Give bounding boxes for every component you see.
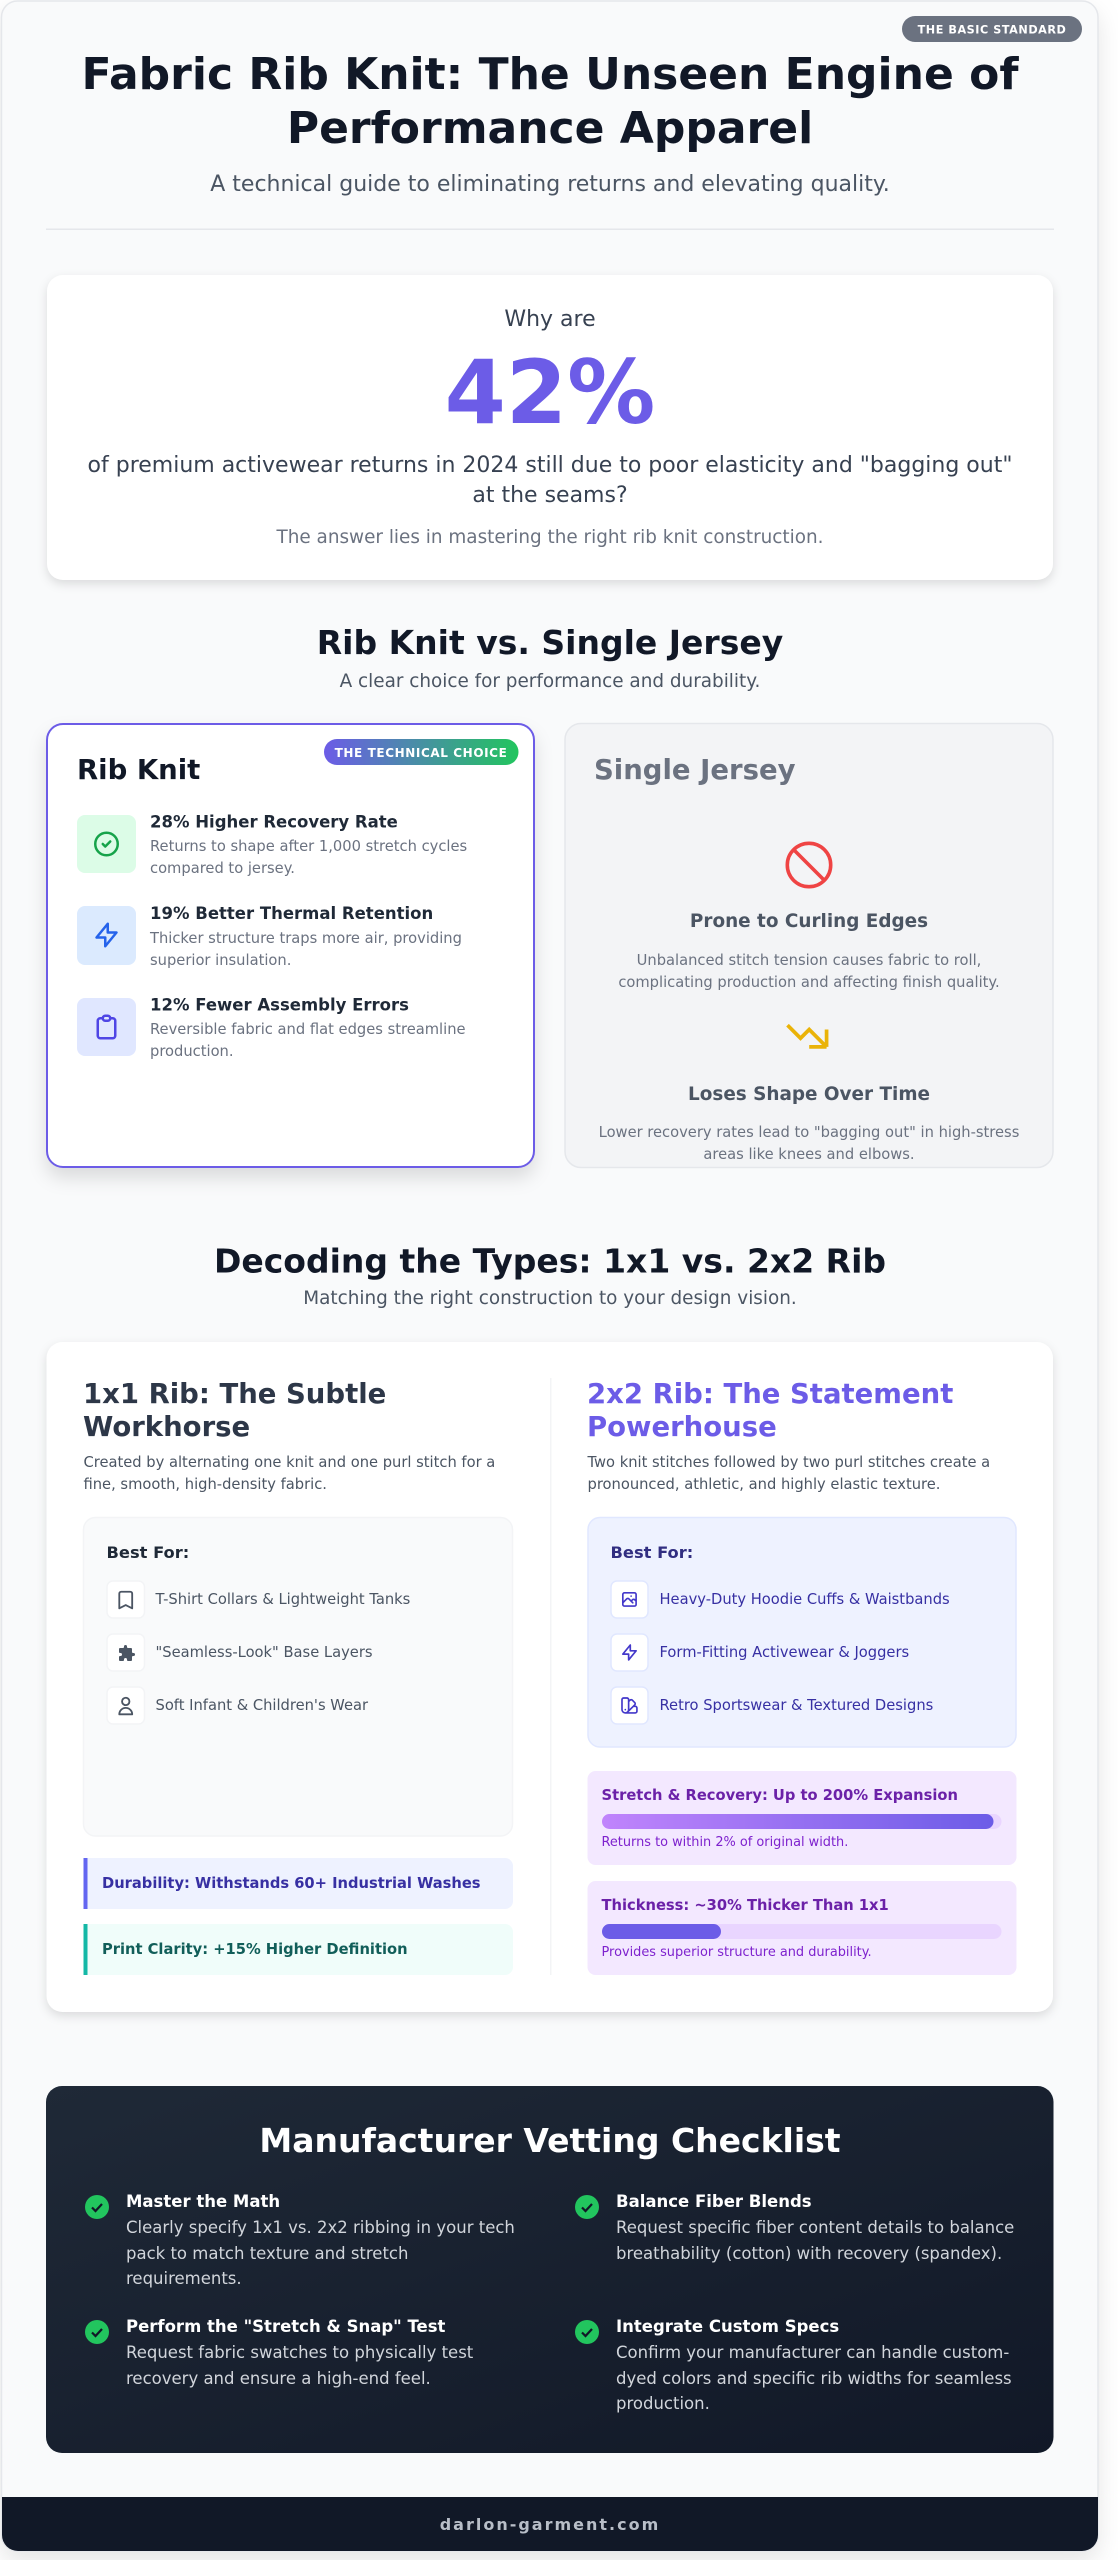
icon: clipboard xyxy=(98,1016,115,1038)
callout: durability: Durability: Withstands 60+ Industrial Washes xyxy=(102,1875,481,1892)
checklist item: master the math: pack to match texture and stretch xyxy=(126,2244,408,2263)
panel: rib knit xyxy=(47,724,534,1167)
feature: recovery rate xyxy=(77,812,467,877)
checklist item: stretch and snap: Request fabric swatches to physically test xyxy=(126,2343,474,2362)
hero question xyxy=(88,453,1012,508)
badge: the basic standard: THE BASIC STANDARD xyxy=(918,24,1066,36)
single jersey heading: Single Jersey xyxy=(594,754,796,786)
best for box: 1x1: Best For: xyxy=(106,1543,189,1562)
feature: assembly errors: Reversible fabric and flat edges streamline xyxy=(150,1021,466,1038)
checklist item: custom specs: dyed colors and specific rib widths for seamless xyxy=(616,2369,1012,2388)
panel: hero statistic xyxy=(47,275,1053,580)
checklist item: balance fiber blends: breathability (cotton) with recovery (spandex). xyxy=(616,2244,1002,2263)
stat: thickness xyxy=(588,1881,1016,1975)
checklist item: custom specs: Integrate Custom Specs xyxy=(616,2317,839,2336)
use: activewear xyxy=(611,1634,909,1671)
feature: recovery rate: 28% Higher Recovery Rate xyxy=(150,812,398,832)
footer: darlon-garment.com xyxy=(440,2515,660,2534)
badge: the basic standard xyxy=(902,16,1082,42)
checklist item: master the math xyxy=(85,2192,515,2288)
use: t-shirt collars xyxy=(107,1581,410,1618)
use: infant wear: Soft Infant & Children's Wear xyxy=(156,1697,369,1714)
use: hoodie cuffs: Heavy-Duty Hoodie Cuffs & Waistbands xyxy=(660,1591,950,1608)
2x2 heading xyxy=(587,1378,953,1443)
hero answer: The answer lies in mastering the right rib knit construction. xyxy=(276,527,824,548)
best for box: 1x1 xyxy=(84,1518,512,1836)
use: seamless base layers: "Seamless-Look" Base Layers xyxy=(156,1644,373,1661)
title: Fabric Rib Knit: The Unseen Engine of xyxy=(82,49,1019,100)
drawback: curling edges: Unbalanced stitch tension causes fabric to roll, xyxy=(637,952,981,969)
use: infant wear xyxy=(107,1687,369,1724)
feature: recovery rate: Returns to shape after 1,000 stretch cycles xyxy=(150,838,467,855)
feature: thermal retention: 19% Better Thermal Retention xyxy=(150,904,433,923)
stat: stretch and recovery: Stretch & Recovery: Up to 200% Expansion xyxy=(602,1787,958,1804)
badge: the technical choice: THE TECHNICAL CHOICE xyxy=(335,746,507,760)
panel: manufacturer vetting checklist xyxy=(46,2086,1054,2453)
stat: thickness: Thickness: ~30% Thicker Than 1x1 xyxy=(602,1897,889,1914)
feature: thermal retention: superior insulation. xyxy=(150,952,291,969)
drawback: loses shape: Loses Shape Over Time xyxy=(688,1084,930,1105)
1x1 heading: Workhorse xyxy=(83,1411,250,1443)
use: retro sportswear: Retro Sportswear & Textured Designs xyxy=(660,1697,933,1714)
feature: recovery rate: compared to jersey. xyxy=(150,860,295,877)
badge: the technical choice xyxy=(324,739,518,765)
checklist item: master the math: Clearly specify 1x1 vs. 2x2 ribbing in your tech xyxy=(126,2218,515,2237)
use: retro sportswear xyxy=(611,1687,933,1724)
heading: decoding the types xyxy=(214,1242,886,1309)
checklist item: balance fiber blends xyxy=(575,2192,1014,2263)
feature: assembly errors xyxy=(77,996,466,1060)
1x1 heading: 1x1 Rib: The Subtle xyxy=(83,1378,386,1410)
feature: assembly errors: production. xyxy=(150,1043,234,1060)
icon: ban xyxy=(787,843,831,887)
icon: lightning xyxy=(96,924,116,946)
feature: thermal retention: Thicker structure traps more air, providing xyxy=(149,930,462,947)
callout: print clarity xyxy=(84,1924,513,1975)
column: 1x1 rib xyxy=(83,1378,513,1975)
use: hoodie cuffs xyxy=(611,1581,950,1618)
1x1 description: fine, smooth, high-density fabric. xyxy=(84,1476,327,1493)
use: activewear: Form-Fitting Activewear & Joggers xyxy=(660,1644,909,1661)
1x1 description xyxy=(84,1454,495,1493)
title xyxy=(82,49,1019,154)
panel: single jersey xyxy=(565,724,1053,1168)
hero question: at the seams? xyxy=(472,483,628,508)
stat: thickness: Provides superior structure and durability. xyxy=(602,1945,872,1960)
1x1 heading xyxy=(83,1378,386,1443)
callout: print clarity: Print Clarity: +15% Higher Definition xyxy=(102,1941,408,1958)
1x1 description: Created by alternating one knit and one purl stitch for a xyxy=(84,1454,495,1471)
subtitle: A technical guide to eliminating returns and elevating quality. xyxy=(210,172,890,197)
checklist item: custom specs: Confirm your manufacturer can handle custom- xyxy=(616,2343,1009,2362)
drawback: loses shape xyxy=(599,1084,1019,1163)
callout: durability xyxy=(84,1858,513,1909)
bar: 98% xyxy=(602,1814,1002,1829)
drawback: curling edges xyxy=(618,911,1000,991)
best for box: 2x2: Best For: xyxy=(610,1543,693,1562)
use: seamless base layers xyxy=(107,1634,373,1671)
drawback: curling edges: complicating production and affecting finish quality. xyxy=(618,974,1000,991)
rib knit heading: Rib Knit xyxy=(77,754,200,786)
checklist item: custom specs xyxy=(575,2317,1012,2413)
checklist item: balance fiber blends: Balance Fiber Blends xyxy=(616,2192,812,2211)
stat: stretch and recovery xyxy=(588,1771,1016,1865)
checklist item: master the math: Master the Math xyxy=(126,2192,280,2211)
stat: stretch and recovery: Returns to within 2% of original width. xyxy=(602,1835,848,1850)
hero intro text: Why are xyxy=(504,307,596,332)
heading: rib knit vs single jersey: Rib Knit vs. Single Jersey xyxy=(317,623,783,662)
title: Performance Apparel xyxy=(287,103,813,154)
checklist item: stretch and snap xyxy=(85,2317,474,2388)
drawback: loses shape: Lower recovery rates lead to "bagging out" in high-stress xyxy=(599,1124,1019,1141)
icon: trending down xyxy=(788,1025,827,1047)
2x2 heading: Powerhouse xyxy=(587,1411,777,1443)
checklist item: master the math: requirements. xyxy=(126,2269,242,2288)
2x2 heading: 2x2 Rib: The Statement xyxy=(587,1378,953,1410)
checklist item: stretch and snap: Perform the "Stretch & Snap" Test xyxy=(126,2317,446,2336)
checklist item: stretch and snap: recovery and ensure a high-end feel. xyxy=(126,2369,431,2388)
heading: decoding the types: Matching the right construction to your design vision. xyxy=(303,1288,797,1309)
drawback: loses shape: areas like knees and elbows. xyxy=(703,1146,915,1163)
panel: rib comparison xyxy=(46,1342,1053,2012)
2x2 description: pronounced, athletic, and highly elastic texture. xyxy=(588,1476,940,1493)
big number 42%: 42% xyxy=(445,341,655,444)
use: t-shirt collars: T-Shirt Collars & Lightweight Tanks xyxy=(154,1591,410,1608)
hero question: of premium activewear returns in 2024 still due to poor elasticity and "bagging out" xyxy=(88,453,1012,478)
footer xyxy=(2,2497,1098,2551)
drawback: curling edges: Prone to Curling Edges xyxy=(690,911,928,932)
heading: decoding the types: Decoding the Types: 1x1 vs. 2x2 Rib xyxy=(214,1242,886,1280)
checklist heading: Manufacturer Vetting Checklist xyxy=(259,2121,841,2160)
checklist item: balance fiber blends: Request specific fiber content details to balance xyxy=(616,2218,1014,2237)
heading: rib knit vs single jersey: A clear choice for performance and durability. xyxy=(340,671,760,692)
checklist item: custom specs: production. xyxy=(616,2394,710,2413)
feature: thermal retention xyxy=(77,904,462,969)
heading: rib knit vs single jersey xyxy=(317,623,783,692)
icon: check circle xyxy=(95,833,118,855)
bar: 30% xyxy=(602,1924,1002,1939)
2x2 description: Two knit stitches followed by two purl stitches create a xyxy=(586,1454,990,1471)
feature: assembly errors: 12% Fewer Assembly Errors xyxy=(150,996,409,1014)
2x2 description xyxy=(586,1454,990,1493)
best for box: 2x2 xyxy=(588,1518,1016,1747)
column: 2x2 rib xyxy=(586,1378,1016,1975)
